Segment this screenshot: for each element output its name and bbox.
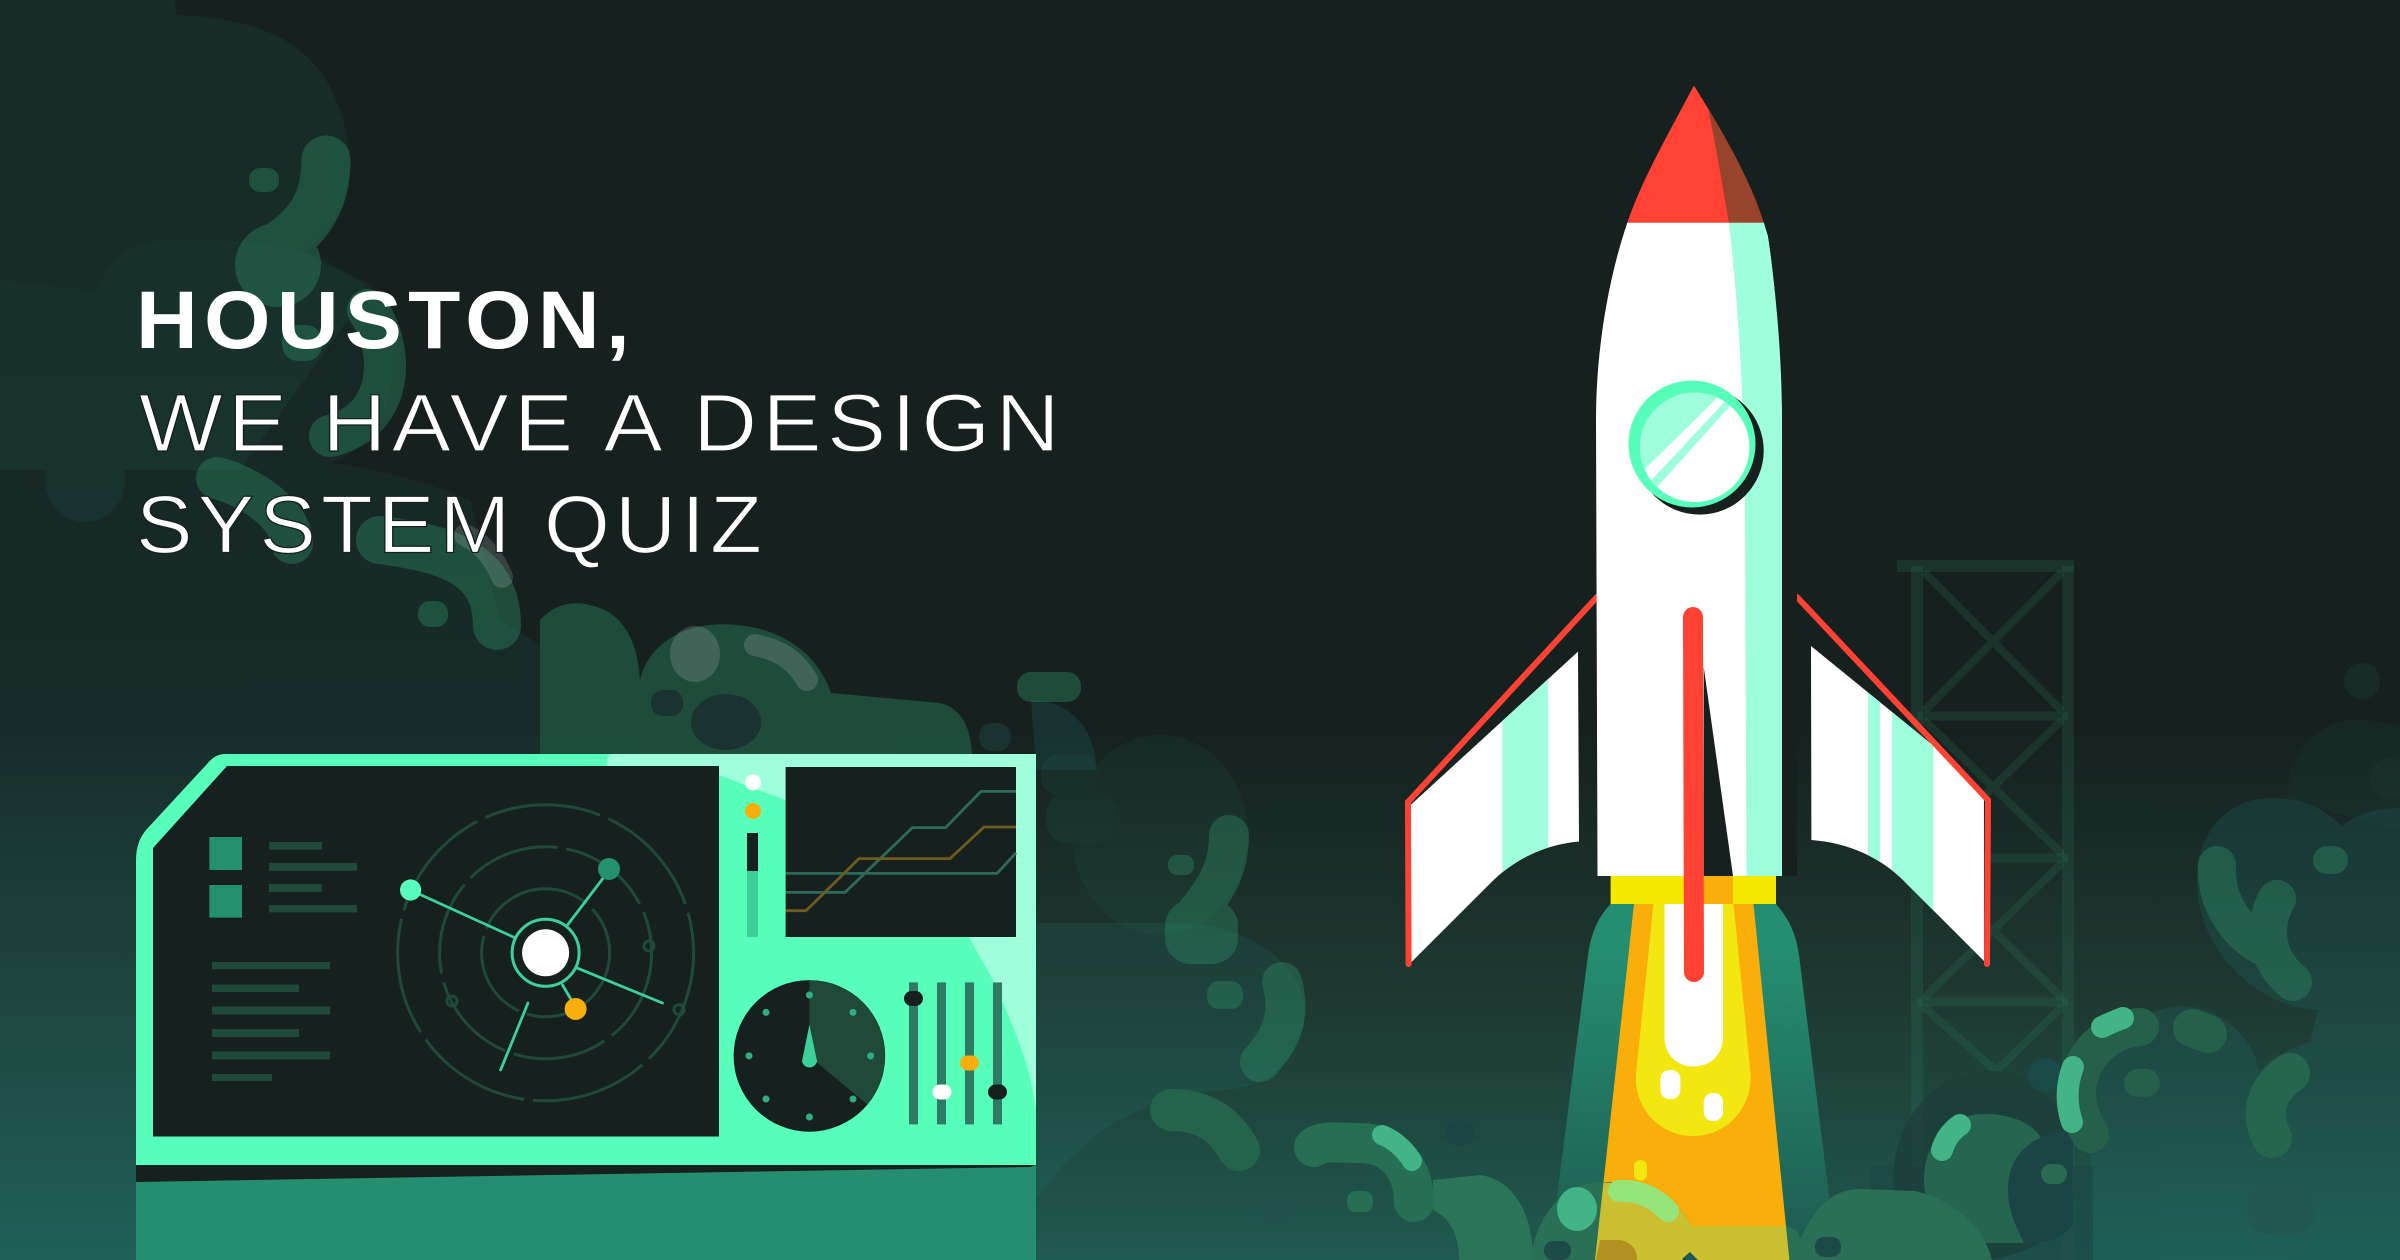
smoke: lower green strokes bbox=[1171, 1018, 2290, 1202]
main screen bbox=[153, 766, 719, 1136]
smoke: pale highlights behind the text bbox=[465, 535, 807, 682]
control panel bbox=[136, 754, 1036, 1165]
flame through smoke bbox=[1590, 1182, 1800, 1260]
control panel base bbox=[136, 1165, 1036, 1260]
tower base box bbox=[1870, 1166, 2093, 1260]
radar rings bbox=[398, 805, 694, 1101]
title line 2: WE HAVE A DESIGN bbox=[139, 378, 1065, 469]
title bbox=[136, 275, 1065, 571]
smoke: foreground puffs bbox=[1433, 1058, 2073, 1260]
flame bbox=[1595, 904, 1789, 1260]
indicator lights bbox=[745, 774, 761, 819]
rocket flame glow bbox=[1549, 904, 1837, 1260]
smoke: dim background clouds bbox=[1031, 700, 2400, 1260]
radar spokes bbox=[419, 877, 662, 1070]
title line 1: HOUSTON, bbox=[136, 275, 636, 366]
radar centre bbox=[522, 929, 569, 976]
red stripe bbox=[1693, 617, 1694, 972]
porthole bbox=[1628, 380, 1764, 515]
nose shading bbox=[1708, 108, 1764, 223]
screen text bars bbox=[212, 842, 357, 1081]
engine ring bbox=[1611, 876, 1776, 904]
smoke: small lower pills bbox=[1258, 1069, 2315, 1235]
level meter bbox=[747, 833, 758, 937]
smoke: faint upper clouds bbox=[0, 0, 2400, 935]
rocket right fin bbox=[1797, 597, 1988, 964]
nose cone bbox=[1627, 86, 1764, 223]
rocket body bbox=[1596, 86, 1797, 876]
screen squares bbox=[209, 837, 242, 918]
sliders bbox=[904, 982, 1007, 1124]
launch tower bbox=[1897, 566, 2074, 1260]
line chart bbox=[786, 767, 1016, 937]
smoke: mid green puffs bbox=[217, 160, 2348, 1062]
body shading bbox=[1729, 223, 1782, 876]
body dark wedge bbox=[1704, 667, 1733, 876]
title line 3: SYSTEM QUIZ bbox=[136, 480, 767, 571]
gauge dial bbox=[734, 980, 885, 1132]
panel light reflection bbox=[607, 754, 1036, 1110]
smoke: left cloud mass bbox=[0, 240, 1036, 1260]
smoke: holes in cloud bbox=[651, 690, 1011, 751]
rocket left fin bbox=[1408, 597, 1597, 964]
hole in smoke cloud bbox=[1596, 1240, 1637, 1260]
radar nodes bbox=[400, 858, 620, 1020]
